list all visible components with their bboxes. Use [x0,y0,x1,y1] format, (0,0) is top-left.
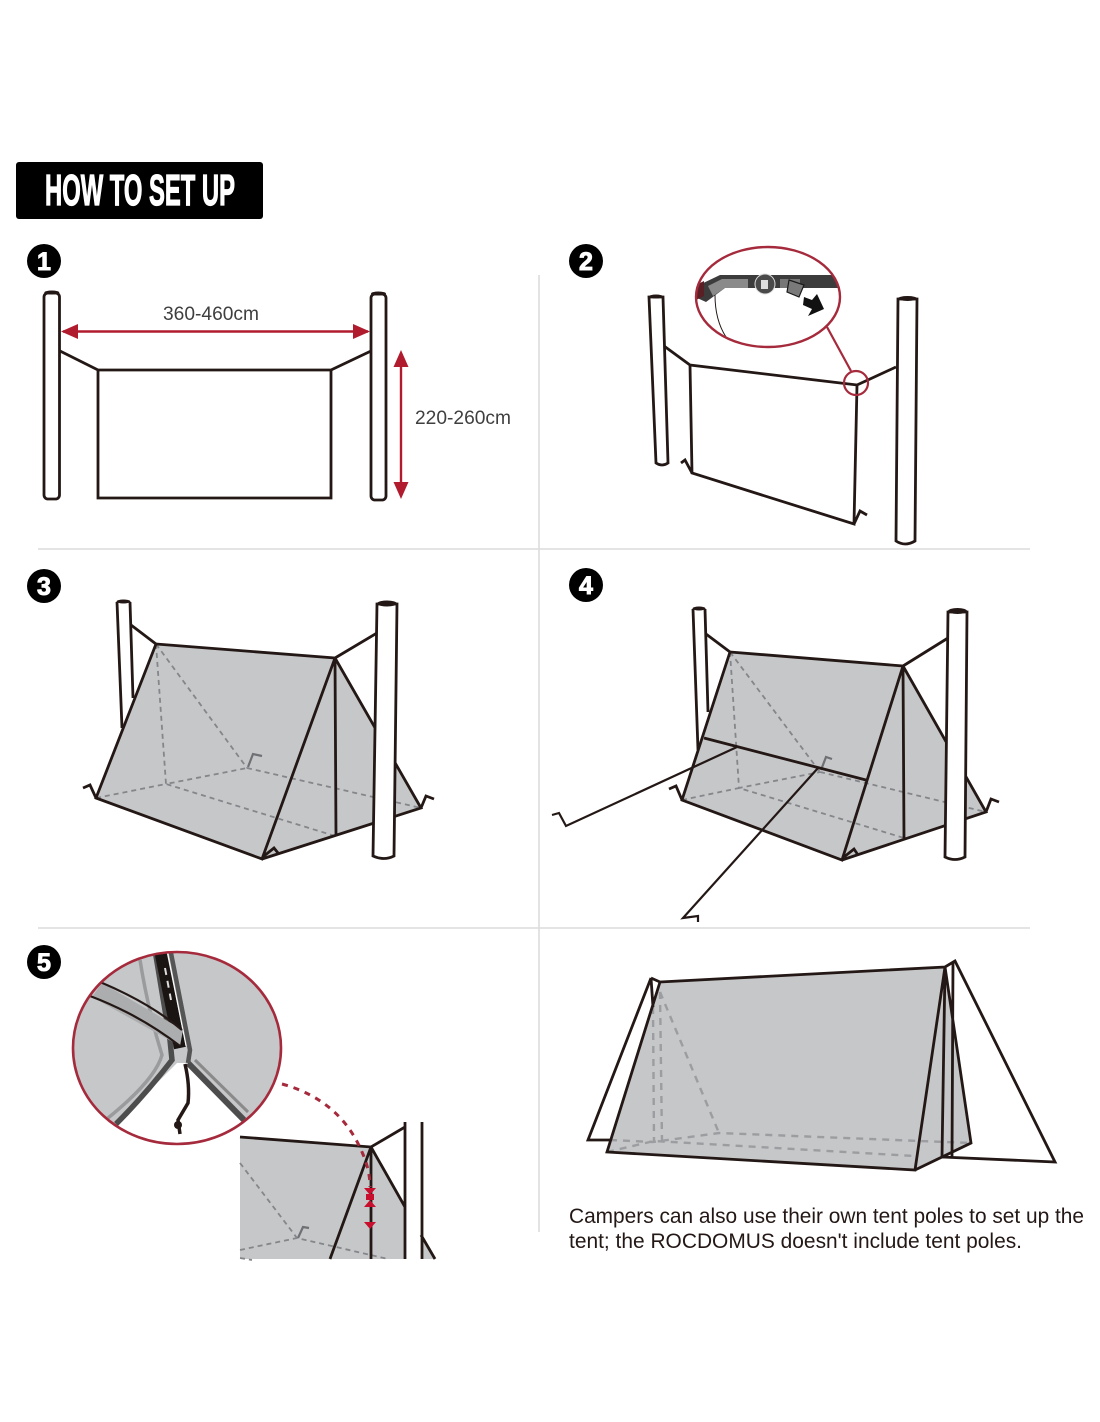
step 3 number [27,569,61,603]
step 5 number [27,945,61,979]
step 4 number: 4 [579,572,593,600]
step 4 diagram: tent with guy lines [552,606,999,922]
note text: Campers can also use their own tent poles to set up the [569,1204,1084,1228]
note text [569,1204,1084,1253]
magnifier: strap buckle [695,247,840,347]
step 2 number: 2 [579,248,593,276]
step 1 number: 1 [37,248,51,276]
step 1 diagram: 360-460cm [163,304,259,325]
step 5 magnifier: zipper detail [73,948,281,1150]
note text: tent; the ROCDOMUS doesn't include tent poles. [569,1229,1022,1253]
title [16,162,263,219]
step 1 number [27,244,61,278]
step 2 number [569,244,603,278]
step 4 number [569,568,603,602]
step 1 diagram: 220-260cm [415,408,511,429]
alternative setup: tent with own poles [588,961,1055,1170]
step 3 number: 3 [37,573,51,601]
step 1 diagram [44,290,511,500]
step 3 diagram: tent [83,600,434,859]
step 5 number: 5 [37,949,51,977]
step 2 diagram [649,247,917,544]
step 5 detail: cropped tent corner [240,1084,435,1260]
title: HOW TO SET UP [45,166,235,215]
